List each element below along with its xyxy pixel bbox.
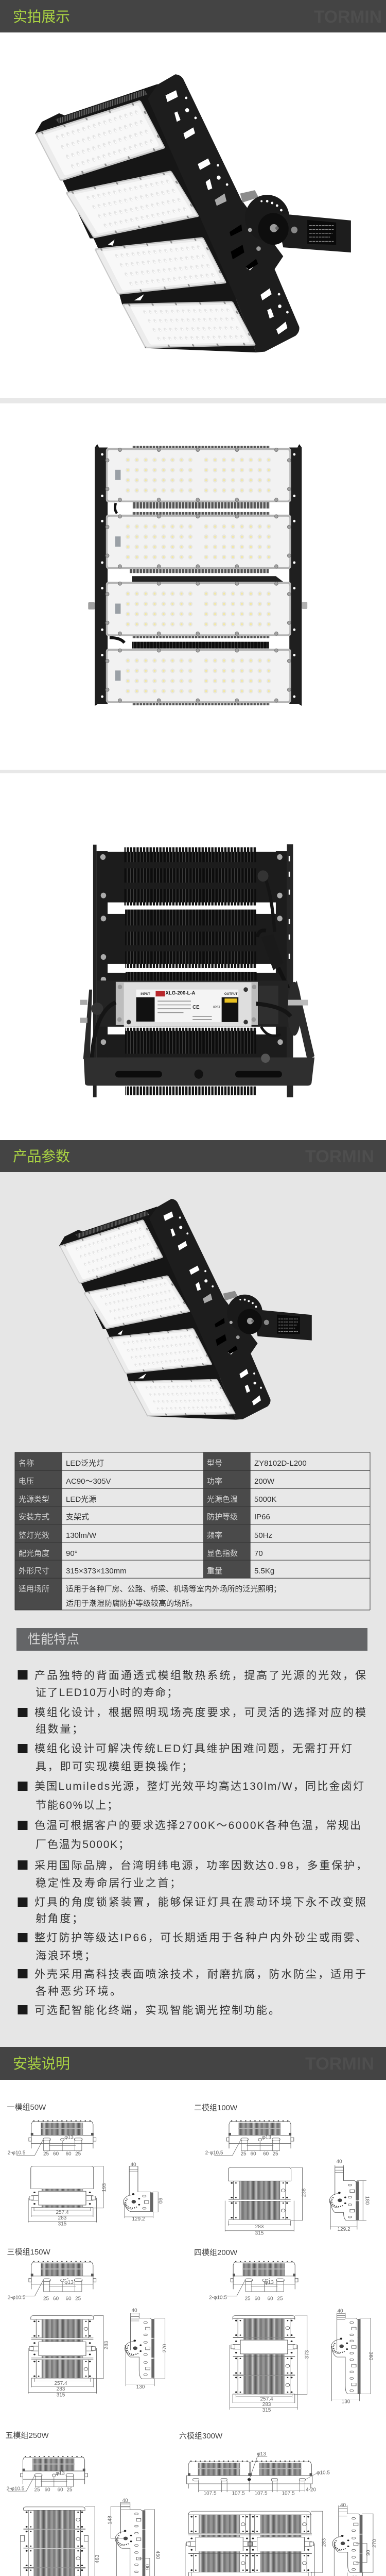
diagram: 一模组50W: 193 [102, 2183, 107, 2192]
feature 7: 射角度； [36, 1913, 83, 1925]
feature 3 [17, 1743, 352, 1773]
diagram: 一模组50W: 60 [65, 2151, 72, 2157]
diagram: 四模组200W: 60 [267, 2296, 273, 2302]
table: product parameters: 200W [254, 1477, 275, 1486]
feature 4: 节能60%以上； [36, 1800, 118, 1811]
table: product parameters: 功率 [207, 1477, 222, 1486]
diagram: 六模组300W: 107.5 [203, 2490, 217, 2497]
diagram: 四模组200W: 2-φ10.5 [209, 2295, 227, 2301]
diagram: 二模组100W: 60 [263, 2151, 269, 2157]
table: product parameters: 名称 [19, 1459, 34, 1468]
diagram: 三模组150W: 40 [131, 2308, 137, 2313]
table: product parameters: LED泛光灯 [66, 1459, 104, 1468]
table: product parameters: 适用于潮湿防腐防护等级较高的场所。 [66, 1599, 197, 1608]
feature 4: 美国Lumileds光源，整灯光效平均高达130lm/W，同比金卤灯 [34, 1781, 364, 1792]
diagram: 一模组50W: 25 [43, 2151, 49, 2157]
heading: 安装说明: 安装说明 [13, 2056, 70, 2072]
diagram: 五模组250W: 40 [122, 2498, 128, 2504]
feature 5: 色温可根据客户的要求选择2700K～6000K各种色温，常规出 [34, 1820, 361, 1832]
photo: product on grey background [59, 1199, 312, 1420]
feature 8: 海浪环境； [36, 1950, 95, 1962]
diagram: 三模组150W: 25 [43, 2296, 49, 2302]
diagram: 四模组200W: 373 [305, 2350, 310, 2359]
diagram: 二模组100W: 2-φ10.5 [205, 2150, 223, 2156]
diagram: 四模组200W: 四模组200W [194, 2248, 238, 2257]
diagram: 四模组200W: 283 [262, 2402, 271, 2408]
diagram: 五模组250W: 25 [34, 2487, 40, 2493]
diagram: 六模组300W: 107.5 [254, 2490, 268, 2497]
diagram: 一模组50W: 40 [130, 2162, 136, 2168]
photo: rear view with driver: OUTPUT [224, 992, 238, 996]
diagram: 四模组200W: φ13 [265, 2280, 274, 2285]
table: product parameters: 型号 [207, 1459, 222, 1468]
feature 6: 采用国际品牌，台湾明纬电源，功率因数达0.98，多重保护， [34, 1860, 367, 1872]
diagram: 四模组200W: 360 [367, 2352, 374, 2361]
table: product parameters: 防护等级 [207, 1512, 238, 1521]
diagram: 二模组100W: 180 [364, 2196, 370, 2205]
diagram: 四模组200W: 60 [254, 2296, 260, 2302]
table: product parameters: LED光源 [66, 1495, 96, 1504]
subheading bar: 性能特点 [16, 1628, 367, 1651]
table: product parameters: 315×373×130mm [66, 1567, 127, 1575]
photo: rear view with driver: XLG-200-L-A [166, 990, 195, 996]
table: product parameters: 适用场所 [19, 1585, 49, 1594]
diagram: 二模组100W: 25 [240, 2151, 247, 2157]
diagram: 三模组150W: φ13 [64, 2280, 74, 2285]
photo: rear view with driver [80, 844, 314, 1097]
feature 4 [17, 1781, 364, 1811]
diagram: 一模组50W: 25 [75, 2151, 81, 2157]
diagram: 三模组150W: 315 [57, 2393, 65, 2398]
diagram: 二模组100W: φ13 [262, 2135, 271, 2140]
section: 安装说明 header [0, 2047, 386, 2080]
table: product parameters: 5000K [254, 1495, 276, 1504]
diagram: 五模组250W: 148 [107, 2516, 113, 2524]
table: product parameters [15, 1452, 370, 1610]
table: product parameters: 光源类型 [19, 1495, 49, 1504]
diagram: 二模组100W: 25 [272, 2151, 278, 2157]
feature 8 [17, 1932, 366, 1962]
table: product parameters: 适用于各种厂房、公路、桥梁、机场等室内外场所的泛光照明； [66, 1584, 281, 1594]
feature 9 [17, 1969, 366, 1997]
photo: front view of four-module floodlight [88, 444, 307, 706]
section: 产品参数 panel background [0, 1172, 386, 2047]
table: product parameters: 5.5Kg [254, 1567, 274, 1575]
diagram: 四模组200W: 315 [262, 2408, 271, 2413]
diagram: 一模组50W: 315 [58, 2222, 67, 2227]
divider band [0, 398, 386, 403]
table: product parameters: 电压 [19, 1477, 34, 1486]
table: product parameters: 130lm/W [66, 1531, 97, 1540]
feature 3: 具，即可实现模组更换操作； [36, 1761, 192, 1773]
feature 6: 稳定性及寿命居行业之首； [36, 1877, 181, 1889]
watermark: TORMIN: TORMIN [305, 1147, 374, 1166]
diagram: 六模组300W: 40 [340, 2503, 346, 2508]
list: product features [17, 1670, 367, 2016]
divider band [0, 770, 386, 773]
feature 6 [17, 1860, 367, 1889]
feature 2 [17, 1707, 366, 1735]
diagram: 二模组100W: 二模组100W [194, 2104, 238, 2112]
diagram: 四模组200W: 257.4 [260, 2397, 273, 2402]
section: 产品参数 header [0, 1140, 386, 1172]
diagram: 三模组150W: 60 [53, 2296, 59, 2302]
diagram: 六模组300W: 90 [365, 2550, 372, 2556]
diagram: 一模组50W: 90 [157, 2198, 163, 2204]
diagram: 二模组100W: 129.2 [337, 2227, 350, 2232]
diagram: 一模组50W: 2-φ10.5 [8, 2150, 26, 2156]
diagram: 四模组200W: 130 [342, 2399, 350, 2405]
diagram: 二模组100W: 60 [250, 2151, 256, 2157]
diagram: 二模组100W: 40 [336, 2159, 342, 2165]
diagram: 三模组150W [7, 2248, 168, 2398]
diagram: 三模组150W: 283 [57, 2386, 65, 2392]
table: product parameters: 整灯光效 [19, 1531, 49, 1540]
diagram: 一模组50W: 129.2 [132, 2216, 145, 2222]
diagram: 五模组250W: φ13 [56, 2471, 65, 2476]
photo: angled four-module floodlight [35, 74, 351, 352]
feature 5: 厂色温为5000K； [36, 1839, 129, 1851]
diagram: 五模组250W: 25 [66, 2487, 73, 2493]
diagram: 二模组100W: 315 [255, 2231, 264, 2236]
diagram: 三模组150W: 三模组150W [7, 2248, 51, 2257]
diagram: 六模组300W: 4-20 [306, 2487, 316, 2493]
diagram: 二模组100W [194, 2104, 370, 2236]
diagram: 一模组50W: φ13 [64, 2135, 74, 2140]
diagram: 四模组200W: 25 [277, 2296, 283, 2302]
feature 2: 模组化设计，根据照明现场亮度要求，可灵活的选择对应的模 [34, 1707, 366, 1719]
diagram: 五模组250W: 450 [154, 2551, 161, 2560]
diagram: 六模组300W [179, 2432, 378, 2576]
table: product parameters: 显色指数 [207, 1549, 238, 1558]
diagram: 三模组150W: 2-φ10.5 [8, 2295, 26, 2301]
feature 9: 外壳采用高科技表面喷涂技术，耐磨抗腐，防水防尘，适用于 [34, 1969, 366, 1980]
table: product parameters: 外形尺寸 [19, 1567, 49, 1575]
diagram: 三模组150W: 257.4 [54, 2381, 67, 2386]
feature 1: 产品独特的背面通透式模组散热系统，提高了光源的光效，保 [34, 1670, 366, 1682]
diagram: 一模组50W: 257.4 [56, 2210, 69, 2215]
diagram: 四模组200W [194, 2248, 374, 2413]
feature 2: 组数量； [36, 1723, 83, 1735]
diagram: 五模组250W: 2-φ10.5 [7, 2486, 25, 2492]
table: product parameters: 光源色温 [207, 1495, 238, 1504]
diagram: 五模组250W [5, 2431, 161, 2576]
diagram: 一模组50W: 一模组50W [7, 2103, 46, 2112]
feature 1: 证了LED10万小时的寿命； [36, 1687, 178, 1699]
diagram: 四模组200W: 25 [244, 2296, 251, 2302]
diagram: 六模组300W: 283 [321, 2538, 327, 2547]
heading: 实拍展示: 实拍展示 [13, 9, 70, 25]
feature 10: 可选配智能化终端，实现智能调光控制功能。 [34, 2005, 279, 2016]
diagram: 四模组200W: 40 [337, 2308, 343, 2314]
feature 5 [17, 1820, 361, 1851]
feature 8: 整灯防护等级达IP66，可长期适用于各种户内外砂尘或雨雾、 [34, 1932, 366, 1944]
table: product parameters: IP66 [254, 1513, 270, 1521]
table: product parameters: 配光角度 [19, 1549, 49, 1558]
diagram: 六模组300W: 六模组300W [179, 2432, 223, 2441]
feature 9: 各种恶劣环境。 [36, 1986, 121, 1997]
table: product parameters: 安装方式 [19, 1513, 49, 1521]
diagram: 六模组300W: 107.5 [232, 2490, 245, 2497]
diagram: 二模组100W: 283 [255, 2224, 264, 2230]
subheading bar: 性能特点: 性能特点 [28, 1632, 79, 1647]
diagram: 三模组150W: 130 [136, 2384, 145, 2390]
table: product parameters: 50Hz [254, 1531, 272, 1540]
table: product parameters: 频率 [207, 1531, 222, 1540]
diagram: 五模组250W: 60 [57, 2487, 63, 2493]
diagram: 二模组100W: 238 [302, 2188, 307, 2197]
feature 7: 灯具的角度锁紧装置，能够保证灯具在震动环境下永不改变照 [34, 1896, 366, 1908]
diagram: 五模组250W: 60 [44, 2487, 50, 2493]
table: product parameters: 70 [254, 1549, 263, 1558]
diagram: 三模组150W: 270 [162, 2344, 168, 2352]
diagram: 五模组250W: 90 [145, 2564, 151, 2570]
feature 1 [17, 1670, 366, 1699]
diagram: 一模组50W: 283 [58, 2215, 67, 2221]
diagram: 三模组150W: 25 [75, 2296, 81, 2302]
table: product parameters: ZY8102D-L200 [254, 1459, 307, 1468]
diagram: 一模组50W [7, 2103, 163, 2227]
diagram: 三模组150W: 283 [104, 2341, 109, 2349]
diagram: 六模组300W: 270 [372, 2539, 378, 2548]
diagram: 六模组300W: 107.5 [282, 2490, 295, 2497]
diagram: 一模组50W: 60 [53, 2151, 59, 2157]
diagram: 五模组250W: 五模组250W [5, 2431, 49, 2440]
section: 实拍展示 header [0, 0, 386, 32]
table: product parameters: 90° [66, 1549, 78, 1558]
diagram: 六模组300W: φ10.5 [317, 2470, 330, 2476]
feature 3: 模组化设计可解决传统LED灯具维护困难问题，无需打开灯 [34, 1743, 352, 1755]
photo: rear view with driver: INPUT [141, 992, 150, 996]
photo: rear view with driver: CE [192, 1005, 200, 1010]
diagram: 六模组300W: φ13 [257, 2451, 266, 2457]
watermark: TORMIN: TORMIN [305, 2054, 374, 2074]
photo: rear view with driver: IP67 [213, 1006, 220, 1009]
diagram: 五模组250W: 463 [95, 2554, 100, 2563]
table: product parameters: AC90～305V [66, 1477, 111, 1486]
watermark: TORMIN: TORMIN [314, 7, 382, 27]
table: product parameters: 重量 [207, 1567, 222, 1575]
heading: 产品参数: 产品参数 [13, 1148, 70, 1164]
feature 7 [17, 1896, 366, 1925]
diagram: 三模组150W: 60 [65, 2296, 72, 2302]
table: product parameters: 支架式 [66, 1513, 89, 1521]
